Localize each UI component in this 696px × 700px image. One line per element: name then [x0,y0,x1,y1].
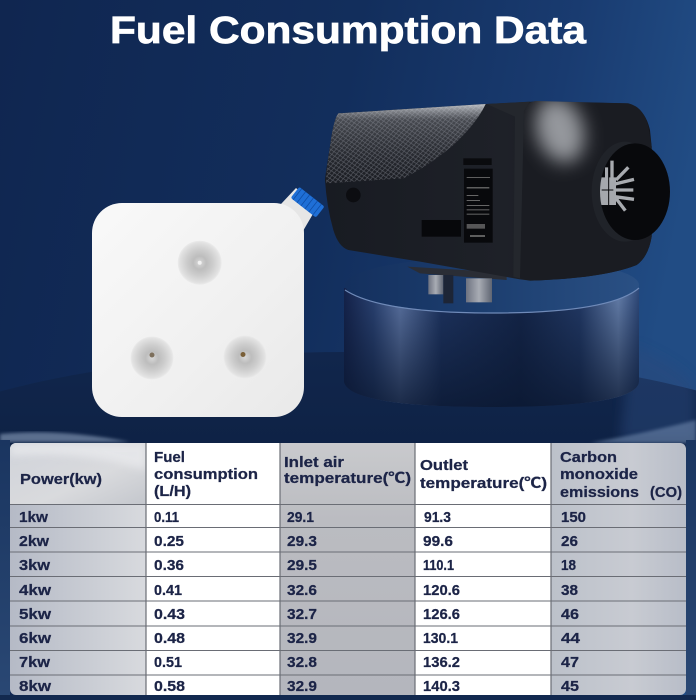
table header: Fuel [154,450,185,466]
row 8kw: 8kw [19,679,52,695]
data table [10,443,686,695]
front housing [520,101,652,281]
row 3kw: 3kw [19,558,51,574]
row 4kw: 4kw [19,583,52,599]
row 4kw: 120.6 [423,583,460,599]
row 3kw: 29.5 [287,558,317,574]
row 5kw: 32.7 [287,607,317,623]
table header [20,450,682,501]
row 5kw [19,608,578,620]
table header: temperature(℃) [284,471,411,487]
table column fills [10,443,686,695]
row 4kw: 32.6 [287,583,317,599]
row 8kw: 0.58 [154,679,185,695]
table header: (CO) [650,485,682,501]
row 2kw: 2kw [19,534,50,550]
row 4kw: 38 [561,583,578,599]
row 1kw: 1kw [19,510,49,526]
table header: Inlet air [284,455,344,471]
pedestal [344,257,639,407]
table header: temperature(℃) [420,476,547,492]
row 5kw: 0.43 [154,607,185,623]
row 5kw: 126.6 [423,607,460,623]
row 7kw [20,656,578,668]
row 6kw: 6kw [19,631,52,647]
row 5kw: 46 [561,607,579,623]
title: Fuel Consumption Data [110,10,587,52]
floor disc [0,352,696,628]
heater body [325,102,652,281]
tank dimples [130,241,266,380]
row 3kw: 110.1 [423,558,454,574]
tank cap [291,187,325,218]
label slot [463,158,492,165]
row 2kw [19,534,578,546]
row 2kw: 26 [561,534,578,550]
row 1kw: 29.1 [287,510,314,526]
row 3kw [19,558,576,570]
row 7kw: 7kw [19,655,51,671]
row 8kw: 140.3 [423,679,460,695]
row 4kw: 0.41 [154,583,182,599]
row 2kw: 99.6 [423,534,453,550]
row 2kw: 0.25 [154,534,184,550]
air outlet duct [600,144,670,240]
row 6kw: 32.9 [287,631,317,647]
row 5kw: 5kw [19,607,52,623]
rating label [464,169,493,243]
table header: consumption [154,467,258,483]
table header: Outlet [420,458,468,474]
table grid [10,443,686,695]
row 3kw: 0.36 [154,558,184,574]
table header: Carbon [560,450,617,466]
table header: (L/H) [154,484,191,500]
table header: Power(kw) [20,472,102,488]
fuel tank [92,187,325,417]
row 1kw [20,510,586,522]
tank neck [281,188,317,231]
row 6kw [20,632,580,644]
row 4kw [19,584,578,596]
table header: emissions [560,485,639,501]
mounting hole [346,188,361,202]
heater unit [325,91,670,303]
row 1kw: 0.11 [154,510,179,526]
row 3kw: 18 [561,558,576,574]
row 6kw: 44 [561,631,580,647]
mounting studs [407,267,507,303]
table header: monoxide [560,467,638,483]
row 8kw [19,680,579,692]
row 7kw: 32.8 [287,655,317,671]
row 7kw: 47 [561,655,579,671]
row 1kw: 91.3 [424,510,451,526]
nameplate [422,220,461,237]
row 8kw: 32.9 [287,679,317,695]
tank body [92,203,304,417]
row 2kw: 29.3 [287,534,317,550]
row 8kw: 45 [561,679,579,695]
row 6kw: 0.48 [154,631,185,647]
row 7kw: 0.51 [154,655,182,671]
row 6kw: 130.1 [423,631,458,647]
row 7kw: 136.2 [423,655,460,671]
row 1kw: 150 [561,510,586,526]
mesh grille [326,104,486,183]
